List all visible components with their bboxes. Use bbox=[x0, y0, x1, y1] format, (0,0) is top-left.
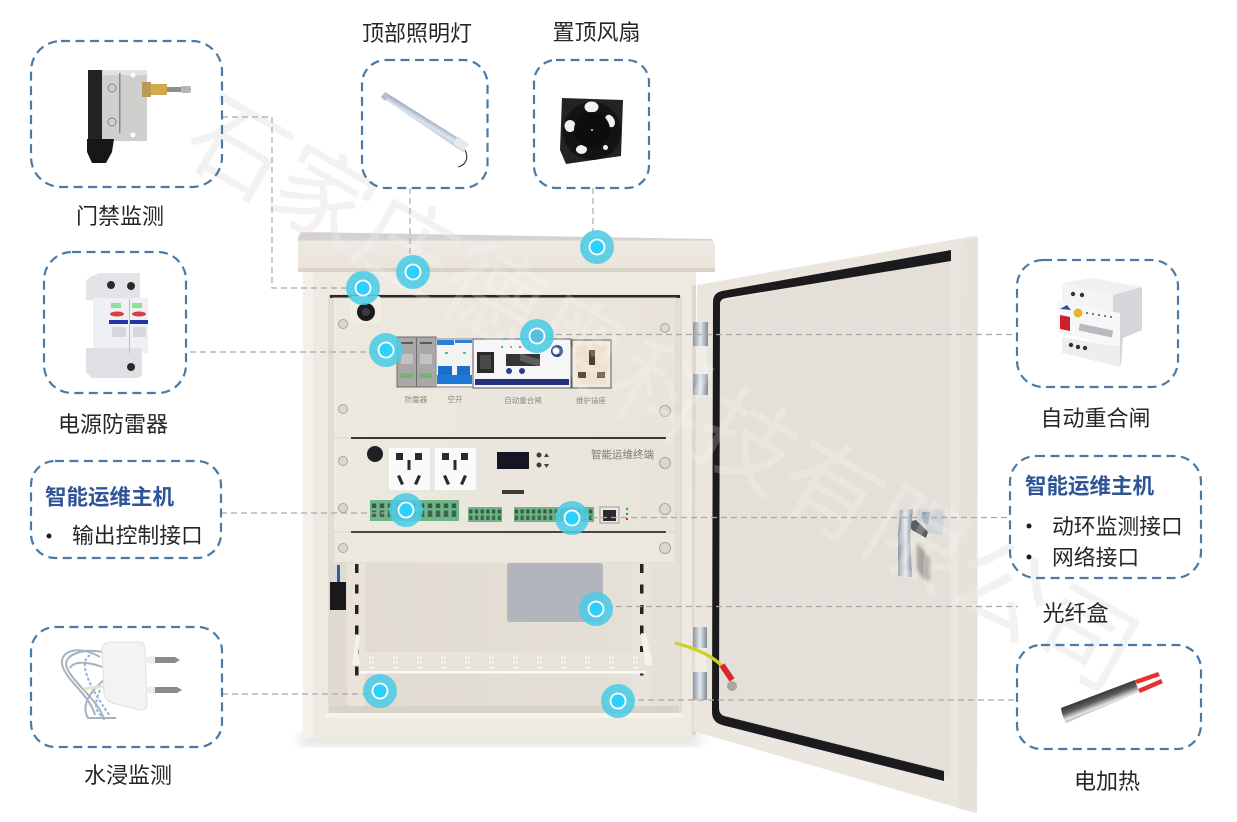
label: top light: 顶部照明灯 bbox=[362, 21, 472, 46]
connector lines bbox=[190, 117, 1018, 700]
label: fiber box: 光纤盒 bbox=[1042, 601, 1109, 626]
label: electric heater: 电加热 bbox=[1074, 769, 1140, 794]
terminal title: 智能运维终端 bbox=[591, 448, 654, 461]
maintenance socket bbox=[572, 340, 611, 388]
SD slot bbox=[502, 490, 524, 494]
module captions: 自动重合闸 bbox=[504, 395, 542, 405]
shelf bbox=[352, 633, 652, 674]
door switch sensor bbox=[350, 296, 381, 323]
black relay bbox=[330, 582, 346, 610]
icon: surge protector bbox=[86, 273, 148, 378]
cabinet body bbox=[303, 268, 696, 739]
latch shadow bbox=[917, 543, 930, 582]
cabinet: main enclosure bbox=[298, 232, 715, 746]
network port bbox=[600, 507, 628, 523]
panel: top light callout bbox=[362, 21, 488, 188]
power knob bbox=[367, 446, 383, 462]
module captions: 维护插座 bbox=[576, 395, 606, 405]
list item: 输出控制接口 bbox=[72, 523, 203, 548]
panel: right host callout bbox=[1010, 456, 1201, 578]
latch bbox=[898, 508, 945, 582]
list item: network port: 网络接口 bbox=[1052, 545, 1139, 570]
panel: electric heater callout bbox=[1017, 645, 1201, 794]
heading: host: 智能运维主机 bbox=[45, 486, 175, 510]
icon: heater bbox=[1061, 672, 1163, 723]
air switch module bbox=[436, 339, 473, 387]
fiber box plate bbox=[507, 563, 603, 622]
icon: auto recloser bbox=[1057, 278, 1142, 367]
panel: water sensor callout bbox=[31, 627, 222, 788]
panel: breaker plate bbox=[333, 296, 676, 438]
label: surge protector: 电源防雷器 bbox=[58, 412, 168, 437]
marker dots bbox=[346, 230, 635, 718]
module captions: 防雷器 bbox=[405, 394, 428, 404]
heading: host: 智能运维主机 bbox=[1025, 474, 1155, 498]
label: top fan: 置顶风扇 bbox=[552, 20, 641, 45]
left mounting rail bbox=[347, 563, 365, 710]
list item: environment port: 动环监测接口 bbox=[1052, 514, 1183, 539]
terminal sockets bbox=[388, 447, 477, 491]
icon: water sensor bbox=[62, 642, 182, 720]
panel: blank plate bbox=[333, 531, 676, 563]
label: auto recloser: 自动重合闸 bbox=[1040, 406, 1151, 431]
door gasket bbox=[712, 250, 951, 781]
icon: limit switch bbox=[87, 70, 191, 163]
watermark overlay on cabinet: 石家庄德奥科技有限公司 bbox=[168, 77, 1156, 711]
label: water sensor: 水浸监测 bbox=[84, 763, 172, 788]
surge protector module bbox=[397, 337, 436, 387]
panel: smart terminal plate bbox=[333, 437, 676, 532]
module captions: 空开 bbox=[448, 394, 463, 404]
auto recloser module bbox=[473, 339, 571, 388]
icon: fan bbox=[560, 98, 623, 164]
panel: left host callout bbox=[31, 461, 221, 558]
panel: auto recloser callout bbox=[1017, 260, 1178, 431]
cabinet roof bbox=[298, 232, 715, 272]
label: door sensor: 门禁监测 bbox=[76, 204, 164, 229]
green terminal blocks bbox=[370, 500, 594, 522]
panel: top fan callout bbox=[534, 20, 649, 188]
door: open cabinet door bbox=[675, 236, 978, 813]
inner frame bbox=[329, 295, 681, 716]
lower compartment bbox=[325, 563, 683, 718]
digital display bbox=[497, 452, 549, 469]
ground wire bbox=[675, 643, 737, 691]
watermark: company name behind cabinet: 石家庄德奥科技有限公司 bbox=[168, 77, 1156, 711]
icon: top light bbox=[381, 92, 468, 167]
right mounting rail bbox=[633, 563, 650, 710]
panel: surge protector callout bbox=[44, 252, 186, 437]
panel: door sensor callout bbox=[31, 41, 222, 229]
module captions bbox=[405, 394, 606, 405]
hinges bbox=[693, 322, 708, 700]
cabinet floor shadow bbox=[300, 732, 700, 746]
